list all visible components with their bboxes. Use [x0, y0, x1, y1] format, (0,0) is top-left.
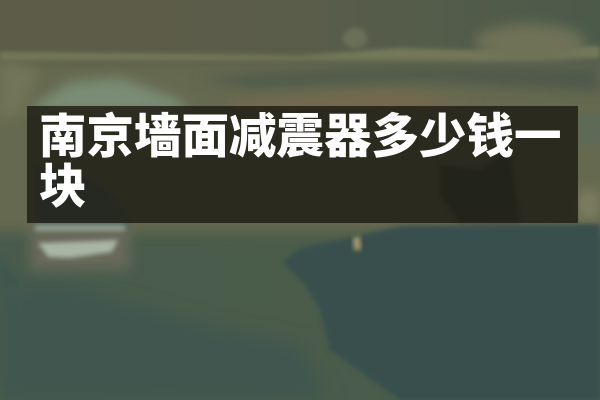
- title panel: [27, 106, 578, 223]
- title: 南京墙面减震器多少钱一块: [39, 111, 562, 214]
